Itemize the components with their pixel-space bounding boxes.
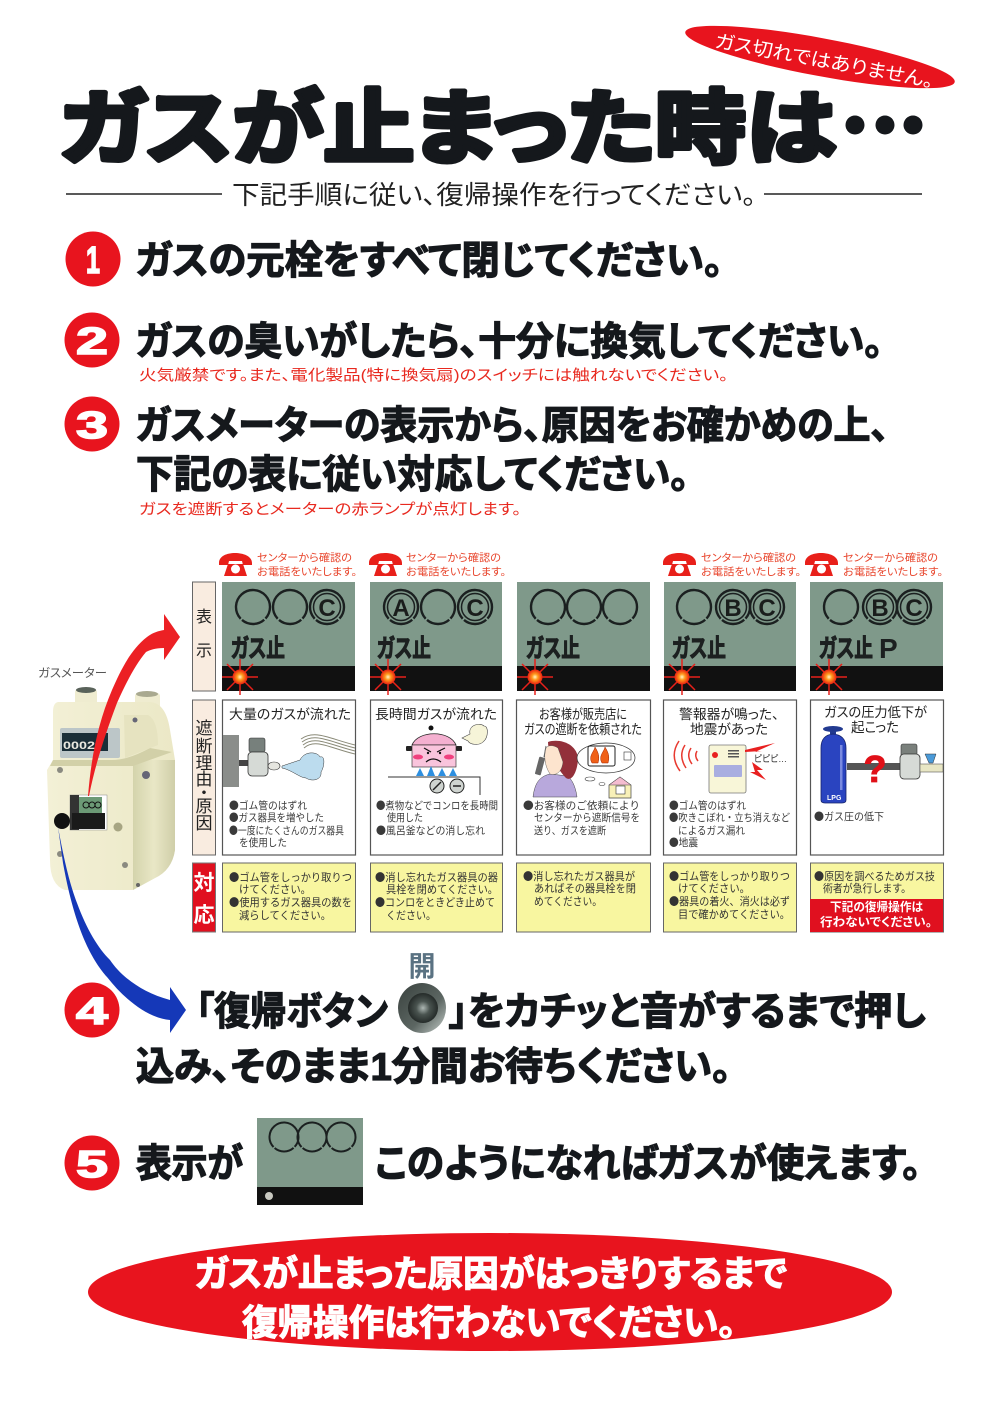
cause box: ●地震 bbox=[669, 835, 698, 850]
table row label: cause: ・ bbox=[200, 784, 208, 803]
icon: LPG tank and regulator: ? bbox=[863, 749, 887, 791]
icon: regulator leaking gas bbox=[223, 735, 355, 787]
icon: LPG tank and regulator bbox=[821, 726, 943, 803]
icon: woman on phone with thought bubble bbox=[533, 741, 635, 798]
step 4: 4 bbox=[76, 991, 108, 1033]
warning banner bbox=[88, 1233, 892, 1351]
cause box: ●煮物などでコンロを長時間 bbox=[376, 798, 498, 813]
meter display bbox=[664, 582, 796, 695]
response box bbox=[810, 863, 944, 932]
response box: ●ゴム管をしっかり取りつ bbox=[669, 868, 790, 884]
column 4 bbox=[663, 551, 801, 932]
step 4: 」をカチッと音がするまで押し bbox=[449, 991, 926, 1034]
response box bbox=[222, 863, 356, 932]
step 2 bbox=[64, 312, 883, 384]
cause box: 起こった bbox=[851, 720, 899, 735]
meter display: C bbox=[758, 595, 776, 622]
icon: angry pot on stove bbox=[388, 724, 487, 795]
meter display: C bbox=[905, 595, 923, 622]
response box: ●使用するガス器具の数を bbox=[229, 894, 352, 910]
column 1 bbox=[219, 551, 357, 932]
cause box bbox=[370, 700, 502, 855]
cause box: ●ゴム管のはずれ bbox=[229, 798, 307, 813]
step 4: 込み、そのまま1分間お待ちください。 bbox=[136, 1046, 731, 1089]
response box: 具栓を閉めてください。 bbox=[386, 881, 498, 897]
phone notice: センターから確認の bbox=[843, 551, 938, 564]
meter display: ガス止 bbox=[819, 635, 873, 663]
table row label: cause: 因 bbox=[196, 814, 212, 833]
cause box: によるガス漏れ bbox=[678, 823, 745, 838]
step 3: ガスを遮断するとメーターの赤ランプが点灯します。 bbox=[139, 501, 521, 518]
meter display bbox=[370, 582, 502, 695]
step 5 bbox=[64, 1117, 921, 1205]
step 3 bbox=[64, 396, 889, 518]
cause box: 警報器が鳴った、 bbox=[679, 707, 779, 722]
warning banner: 復帰操作は行わないでください。 bbox=[242, 1302, 736, 1343]
warning banner: ガスが止まった原因がはっきりするまで bbox=[195, 1253, 787, 1294]
cause box: ●一度にたくさんのガス器具 bbox=[229, 823, 344, 838]
cause box: 大量のガスが流れた bbox=[229, 707, 351, 722]
meter display bbox=[810, 582, 943, 695]
table row label: response bbox=[192, 863, 216, 932]
meter display: B bbox=[724, 595, 742, 622]
cause box: 送り、ガスを遮断 bbox=[534, 823, 606, 838]
step 4: 「復帰ボタン bbox=[196, 991, 388, 1034]
phone notice: センターから確認の bbox=[406, 551, 501, 564]
step 2: 2 bbox=[76, 321, 108, 363]
step 3: 下記の表に従い対応してください。 bbox=[136, 454, 689, 497]
response box: 目で確かめてください。 bbox=[678, 906, 790, 922]
phone notice: お電話をいたします。 bbox=[257, 566, 357, 578]
response box: けてください。 bbox=[239, 881, 311, 897]
meter display: ガス止 bbox=[526, 635, 580, 663]
step 3: ガスメーターの表示から、原因をお確かめの上、 bbox=[136, 405, 889, 448]
icon: reset button bbox=[398, 951, 446, 1033]
table row label: cause: 遮 bbox=[196, 719, 212, 738]
phone notice: お電話をいたします。 bbox=[701, 566, 801, 578]
response box: けてください。 bbox=[678, 880, 750, 896]
cause box: ガスの遮断を依頼された bbox=[524, 722, 642, 737]
icon: alarm device bbox=[674, 741, 787, 793]
phone notice: センターから確認の bbox=[257, 551, 352, 564]
table row label: cause bbox=[192, 700, 216, 855]
table row label: response: 応 bbox=[194, 904, 214, 927]
icon: reset button: 開 bbox=[408, 951, 436, 982]
phone notice bbox=[369, 551, 506, 578]
phone notice: お電話をいたします。 bbox=[406, 566, 506, 578]
arrow: blue to reset button bbox=[58, 827, 186, 1033]
cause box bbox=[664, 700, 796, 855]
meter display: A bbox=[392, 595, 410, 622]
phone notice: センターから確認の bbox=[701, 551, 796, 564]
table row label: cause: 理 bbox=[196, 754, 212, 773]
illustration: gas meter: ガスメーター bbox=[38, 666, 107, 680]
cause box bbox=[222, 700, 356, 855]
cause box: ●風呂釜などの消し忘れ bbox=[376, 823, 485, 838]
column 3 bbox=[516, 582, 650, 932]
cause box bbox=[516, 700, 650, 855]
meter display: C bbox=[466, 595, 484, 622]
response box: ください。 bbox=[386, 907, 436, 923]
meter display: C bbox=[318, 595, 336, 622]
icon: LPG tank and regulator: LPG bbox=[827, 795, 842, 802]
step 2: 火気厳禁です。また、電化製品(特に換気扇)のスイッチには触れないでください。 bbox=[139, 367, 728, 384]
meter display: ガス止 bbox=[672, 635, 726, 663]
arrow: red to display bbox=[88, 614, 180, 796]
response box: ●消し忘れたガス器具の器 bbox=[375, 869, 498, 885]
column 2 bbox=[369, 551, 506, 932]
illustration: gas meter bbox=[38, 666, 175, 890]
step 2: ガスの臭いがしたら、十分に換気してください。 bbox=[136, 321, 883, 364]
response box: ●原因を調べるためガス技 bbox=[814, 868, 935, 884]
response box bbox=[370, 863, 502, 932]
meter display: P bbox=[879, 633, 898, 664]
table row label: response: 対 bbox=[194, 872, 214, 895]
response box: 減らしてください。 bbox=[239, 907, 331, 923]
meter display: ガス止 bbox=[231, 635, 285, 663]
meter display bbox=[517, 582, 650, 695]
phone notice bbox=[663, 551, 801, 578]
meter display: B bbox=[871, 595, 889, 622]
title: ガスが止まった時は bbox=[60, 85, 836, 175]
cause box: ●お客様のご依頼により bbox=[523, 798, 640, 813]
subtitle: 下記手順に従い、復帰操作を行ってください。 bbox=[232, 180, 756, 210]
cause box: ●吹きこぼれ・立ち消えなど bbox=[669, 810, 790, 825]
cause box: 使用した bbox=[387, 810, 423, 825]
table row label: display bbox=[192, 582, 216, 691]
step 5: 表示が bbox=[136, 1143, 243, 1186]
cause box: 地震があった bbox=[690, 722, 768, 737]
table row label: cause: 原 bbox=[196, 797, 212, 816]
icon: alarm device: ピピピ… bbox=[754, 754, 787, 765]
callout: not out of gas bbox=[682, 13, 958, 101]
response box: あればその器具栓を閉 bbox=[534, 880, 636, 896]
cause box bbox=[810, 700, 944, 855]
cause box: ガスの圧力低下が bbox=[824, 705, 928, 720]
normal meter display bbox=[257, 1117, 363, 1205]
step 3: 3 bbox=[76, 405, 108, 447]
phone notice: お電話をいたします。 bbox=[843, 566, 943, 578]
response box: ●器具の着火、消火は必ず bbox=[669, 893, 790, 909]
response box: めてください。 bbox=[534, 893, 602, 909]
meter display: ガス止 bbox=[377, 635, 431, 663]
response box: 行わないでください。 bbox=[820, 914, 932, 929]
step 1: 1 bbox=[86, 240, 100, 282]
step 5: 5 bbox=[76, 1144, 108, 1186]
response box: ●消し忘れたガス器具が bbox=[523, 868, 635, 884]
step 4 bbox=[64, 951, 926, 1089]
step 1 bbox=[66, 232, 723, 286]
step 1: ガスの元栓をすべて閉じてください。 bbox=[136, 240, 723, 283]
table row label: cause: 断 bbox=[196, 737, 212, 756]
response box bbox=[664, 863, 796, 932]
table row label: display: 表 bbox=[196, 608, 212, 626]
cause box: を使用した bbox=[239, 835, 287, 850]
cause box: 長時間ガスが流れた bbox=[375, 707, 497, 722]
response box: 下記の復帰操作は bbox=[830, 899, 923, 914]
response box: ●コンロをときどき止めて bbox=[375, 894, 495, 910]
response box: 術者が急行します。 bbox=[823, 880, 911, 896]
column 5 bbox=[805, 551, 944, 932]
cause box: お客様が販売店に bbox=[539, 706, 627, 722]
table row label: display: 示 bbox=[196, 643, 212, 660]
cause box: センターから遮断信号を bbox=[534, 810, 640, 825]
table row label: cause: 由 bbox=[196, 770, 212, 789]
cause box: ●ゴム管のはずれ bbox=[669, 798, 746, 813]
cause box: ●ガス圧の低下 bbox=[814, 809, 884, 824]
step 5: このようになればガスが使えます。 bbox=[375, 1143, 921, 1186]
response box: ●ゴム管をしっかり取りつ bbox=[229, 869, 352, 885]
illustration: gas meter: 0002 bbox=[63, 740, 95, 752]
callout: not out of gas: ガス切れではありません。 bbox=[713, 30, 935, 92]
response box bbox=[516, 863, 650, 932]
phone notice bbox=[219, 551, 357, 578]
meter display bbox=[222, 582, 355, 695]
cause box: ●ガス器具を増やした bbox=[229, 810, 324, 825]
phone notice bbox=[805, 551, 943, 578]
